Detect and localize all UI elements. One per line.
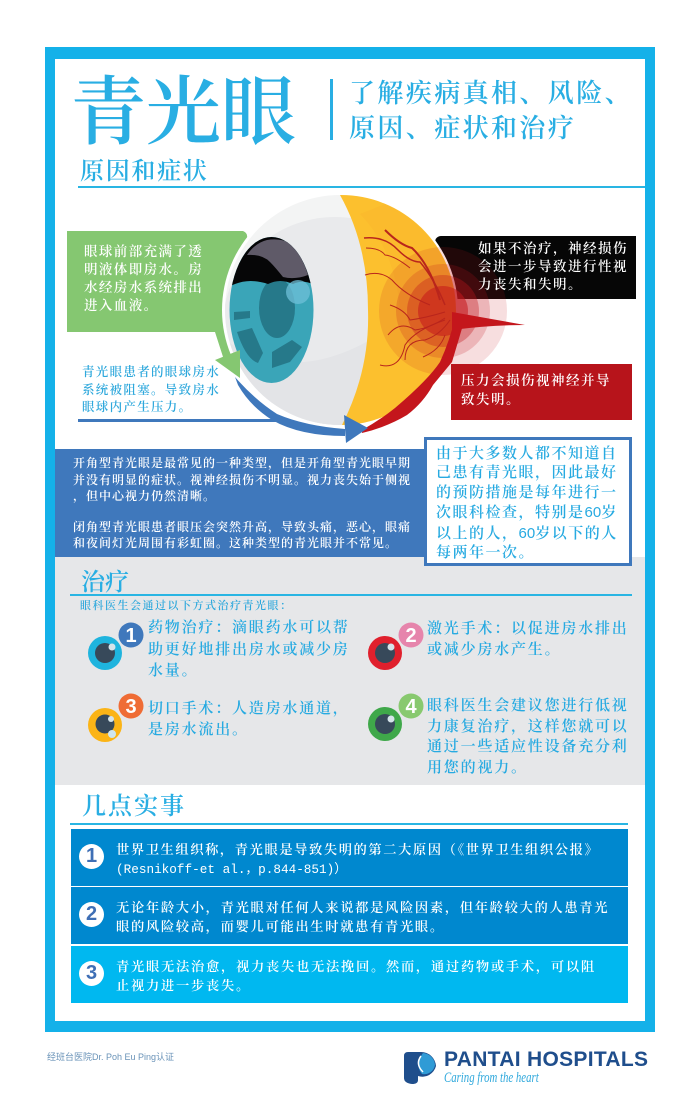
black note text: 会进一步导致进行性视 — [478, 259, 628, 274]
green arrowhead — [215, 350, 240, 378]
black note text — [478, 241, 628, 292]
fact 1 number: 1 — [86, 845, 97, 867]
blood vessels — [364, 230, 450, 366]
logo tagline: Caring from the heart — [444, 1070, 539, 1086]
heading: treatment: 治疗 — [81, 570, 129, 596]
fact 2 number: 2 — [86, 903, 97, 925]
treatment 1 text: 助更好地排出房水或减少房 — [148, 642, 350, 658]
green note text: 进入血液。 — [84, 298, 158, 313]
fact 3 — [71, 946, 628, 1003]
subtitle: 了解疾病真相、风险、 — [349, 79, 633, 108]
icon: eye 1 — [88, 622, 144, 670]
treatment 4 text — [427, 697, 629, 776]
facts rule — [70, 823, 628, 825]
fact 1 text: 世界卫生组织称，青光眼是导致失明的第二大原因（《世界卫生组织公报》 — [116, 842, 599, 857]
gray treatment band — [55, 557, 645, 785]
green note text: 明液体即房水。房 — [84, 262, 203, 277]
glaucoma types text: 闭角型青光眼患者眼压会突然升高，导致头痛，恶心，眼痛 — [73, 520, 411, 534]
green note text: 水经房水系统排出 — [84, 280, 203, 295]
fact 2 — [71, 887, 628, 944]
fact 3 number: 3 — [86, 962, 97, 984]
fact 3 text: 止视力进一步丧失。 — [116, 978, 251, 992]
red note text — [461, 373, 611, 407]
title: 青光眼 — [71, 72, 296, 155]
treatment 1 text — [148, 619, 350, 679]
red pressure rings — [379, 247, 507, 375]
fact 2 text — [116, 900, 609, 934]
blocked drainage text — [82, 365, 220, 414]
treatment 3 text: 是房水流出。 — [148, 722, 249, 738]
glaucoma types text: 和夜间灯光周围有彩虹圈。这种类型的青光眼并不常见。 — [73, 536, 398, 550]
fact 1 text: (Resnikoff-et al.，p.844-851)） — [116, 862, 347, 876]
logo name: PANTAI HOSPITALS — [444, 1048, 648, 1071]
callout: prevention — [424, 437, 632, 566]
blocked drainage text: 青光眼患者的眼球房水 — [82, 365, 220, 379]
treatment 4 text: 力康复治疗，这样您就可以 — [427, 718, 629, 734]
icon: eye 4: 4 — [405, 696, 417, 718]
icon: eye 2: 2 — [405, 625, 417, 647]
callout text: 以上的人，60岁以下的人 — [436, 525, 618, 542]
blue arrow — [78, 377, 368, 443]
panel: black note background — [435, 236, 636, 299]
icon: eye 4 — [368, 694, 424, 741]
outer frame — [45, 47, 655, 1032]
glaucoma types text — [73, 456, 411, 550]
yellow retina crescent — [340, 195, 456, 425]
green note text — [84, 244, 203, 313]
heading: facts: 几点实事 — [82, 794, 186, 820]
title divider — [330, 79, 333, 140]
treatment 2 text: 或减少房水产生。 — [427, 642, 561, 658]
glaucoma types text: ，但中心视力仍然清晰。 — [73, 489, 216, 503]
treatment 1 text: 药物治疗：滴眼药水可以帮 — [148, 620, 350, 636]
fact 2 number — [79, 902, 104, 927]
callout text: 己患有青光眼，因此最好 — [436, 465, 618, 481]
subtitle — [349, 79, 633, 143]
treatment 3 text: 切口手术：人造房水通道， — [148, 701, 350, 717]
icon: eye 1: 1 — [125, 625, 137, 647]
optic nerve arrow — [362, 312, 525, 433]
green note text: 眼球前部充满了透 — [84, 244, 203, 259]
eyeball white — [222, 192, 458, 433]
treatment 1 text: 水量。 — [148, 663, 198, 679]
fact 3 text — [116, 959, 596, 992]
callout text: 每两年一次。 — [436, 545, 535, 561]
fact 1 number — [79, 844, 104, 869]
glaucoma types text: 开角型青光眼是最常见的一种类型，但是开角型青光眼早期 — [73, 456, 411, 470]
treatment rule — [70, 594, 632, 596]
icon: eye 3: 3 — [125, 696, 137, 718]
fact 3 text: 青光眼无法治愈，视力丧失也无法挽回。然而，通过药物或手术，可以阻 — [116, 959, 596, 974]
treatment 2 text: 激光手术：以促进房水排出 — [427, 621, 629, 637]
red note text: 压力会损伤视神经并导 — [461, 373, 611, 388]
callout text: 的预防措施是每年进行一 — [436, 485, 618, 501]
callout text — [436, 445, 618, 561]
callout text: 由于大多数人都不知道自 — [436, 446, 618, 462]
blocked drainage text: 眼球内产生压力。 — [82, 400, 192, 414]
heading rule — [78, 186, 645, 188]
subtitle: 原因、症状和治疗 — [349, 114, 576, 143]
treatment 3 text — [148, 700, 350, 738]
black note text: 力丧失和失明。 — [478, 277, 583, 292]
icon: hospital logo — [404, 1052, 436, 1084]
fact 1 text — [116, 842, 599, 876]
footer credit: 经班台医院Dr. Poh Eu Ping认证 — [47, 1052, 174, 1062]
treatment intro: 眼科医生会通过以下方式治疗青光眼： — [80, 600, 292, 612]
fact 3 number — [79, 961, 104, 986]
fact 1 — [71, 829, 628, 886]
icon: eye 3 — [88, 694, 144, 742]
iris — [230, 237, 314, 383]
treatment 2 text — [427, 620, 629, 658]
fact 2 text: 无论年龄大小，青光眼对任何人来说都是风险因素，但年龄较大的人患青光 — [116, 900, 609, 915]
panel: red note background — [451, 364, 632, 420]
eye diagram — [78, 195, 525, 443]
blue band — [55, 449, 430, 557]
fact 2 text: 眼的风险较高，而婴儿可能出生时就患有青光眼。 — [116, 918, 445, 934]
treatment 4 text: 眼科医生会建议您进行低视 — [427, 698, 629, 714]
icon: eye 2 — [368, 622, 424, 670]
black note text: 如果不治疗，神经损伤 — [478, 241, 628, 256]
callout text: 次眼科检查，特别是60岁 — [436, 504, 618, 521]
red note text: 致失明。 — [461, 392, 521, 407]
glaucoma types text: 并没有明显的症状。视神经损伤不明显。视力丧失始于侧视 — [73, 472, 411, 486]
heading: causes and symptoms: 原因和症状 — [80, 159, 208, 185]
treatment 4 text: 通过一些适应性设备充分利 — [427, 739, 629, 755]
treatment 4 text: 用您的视力。 — [427, 760, 528, 776]
blocked drainage text: 系统被阻塞。导致房水 — [82, 382, 220, 396]
